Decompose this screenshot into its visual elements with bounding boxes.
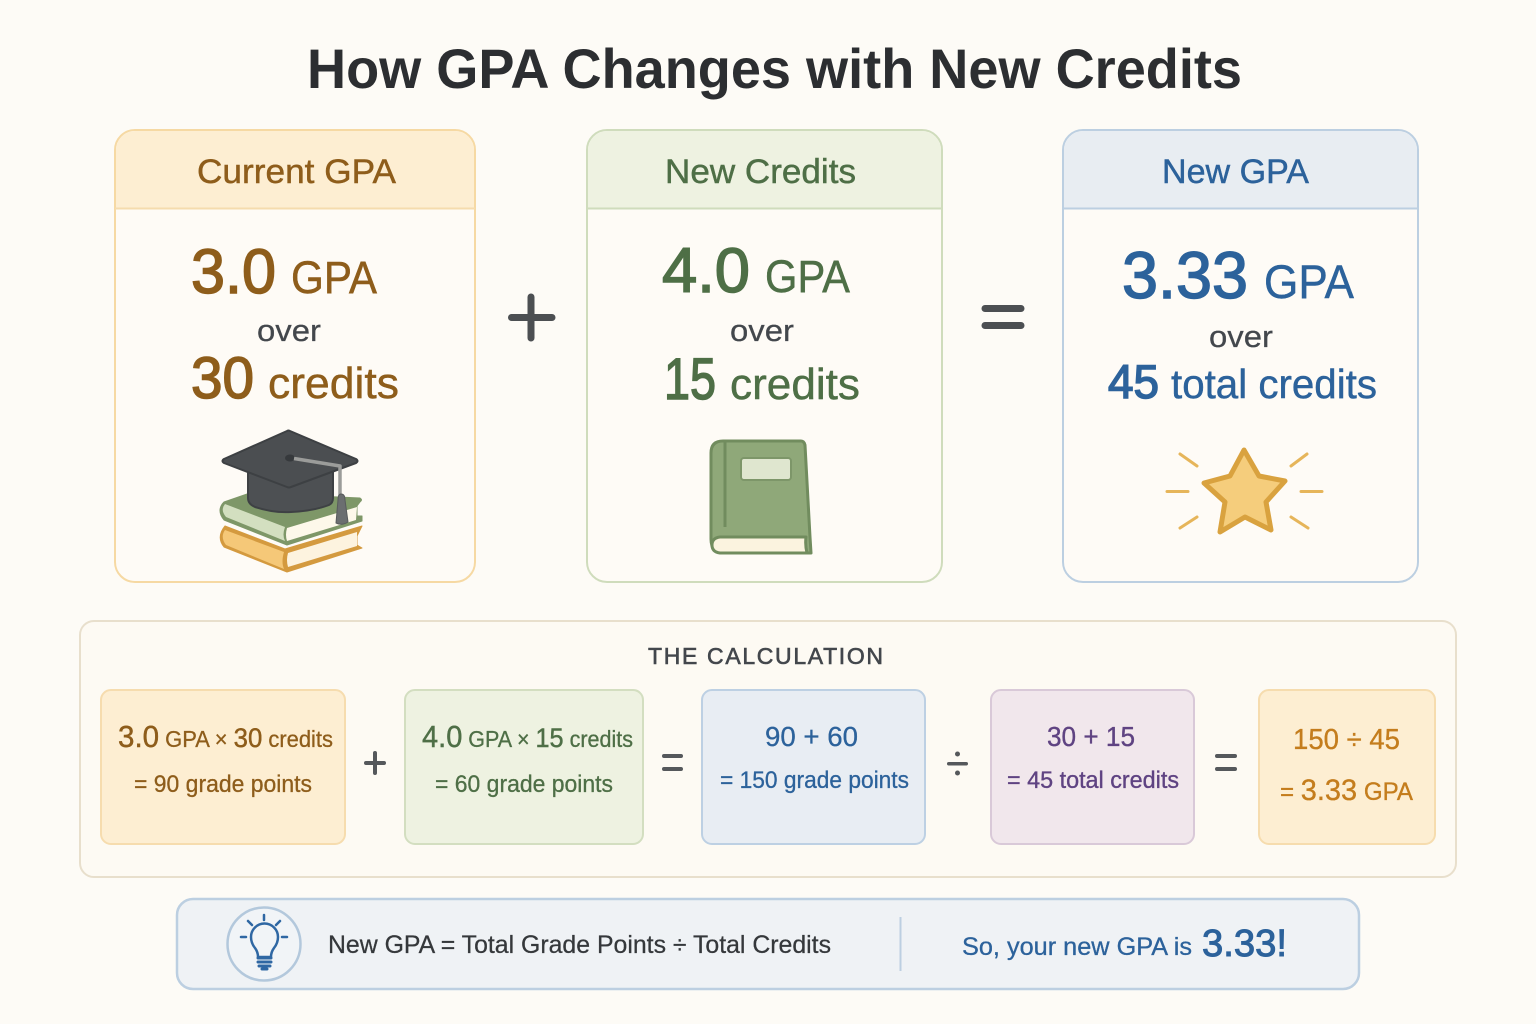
value: 15 credits: credits bbox=[730, 360, 860, 409]
value: 4.0 GPA bbox=[662, 236, 850, 306]
value: 15 credits: 15 bbox=[664, 347, 716, 412]
step: total grade points: = 150 grade points bbox=[720, 767, 909, 794]
operator: equals bbox=[664, 756, 681, 769]
value: 3.33 GPA: GPA bbox=[1264, 255, 1355, 308]
value: 45 total credits: 45 bbox=[1108, 355, 1159, 408]
step: result bbox=[1259, 690, 1435, 844]
result text: So, your new GPA is bbox=[962, 933, 1192, 961]
operator: plus bbox=[366, 753, 384, 773]
value: 3.0 GPA: 3.0 bbox=[191, 237, 276, 307]
value: 30 credits bbox=[191, 346, 399, 411]
result text: 3.33! bbox=[1202, 923, 1287, 965]
panel header: new GPA bbox=[1063, 131, 1418, 208]
operator: equals bbox=[1217, 756, 1235, 769]
panel: new credits bbox=[587, 130, 942, 582]
step: new grade points: = 60 grade points bbox=[435, 771, 613, 798]
operator: plus bbox=[512, 297, 552, 338]
step: current grade points bbox=[101, 690, 345, 844]
panel: new GPA bbox=[1063, 130, 1418, 582]
panel: the calculation bbox=[80, 621, 1456, 877]
step: total grade points: 90 + 60 bbox=[765, 721, 858, 752]
panel header: new GPA: New GPA bbox=[1162, 153, 1309, 191]
step: total credits: = 45 total credits bbox=[1007, 767, 1179, 794]
step: total credits bbox=[991, 690, 1194, 844]
operator: divide bbox=[947, 752, 968, 776]
value: 45 total credits bbox=[1108, 355, 1377, 408]
value: 3.33 GPA bbox=[1122, 238, 1355, 312]
step: result: = 3.33 GPA bbox=[1280, 774, 1413, 807]
value: 15 credits bbox=[664, 347, 860, 412]
step: current grade points: 3.0 GPA × 30 credits bbox=[118, 719, 333, 754]
value: 45 total credits: total credits bbox=[1171, 361, 1377, 407]
operator: equals bbox=[985, 308, 1021, 326]
step: total credits: 30 + 15 bbox=[1047, 721, 1135, 752]
icon: light bulb bbox=[228, 908, 300, 980]
heading: the calculation: THE CALCULATION bbox=[648, 643, 883, 669]
panel header: current GPA: Current GPA bbox=[197, 153, 396, 191]
icon: graduation cap on books bbox=[220, 430, 362, 572]
value: 3.0 GPA bbox=[191, 237, 377, 307]
panel: summary bar bbox=[177, 899, 1359, 989]
step: current grade points: = 90 grade points bbox=[134, 771, 312, 798]
icon: star with rays bbox=[1167, 450, 1322, 532]
result text bbox=[962, 923, 1287, 965]
value: 4.0 GPA: GPA bbox=[765, 251, 850, 302]
panel: current GPA bbox=[115, 130, 475, 582]
title: How GPA Changes with New Credits bbox=[307, 37, 1242, 100]
formula text: New GPA = Total Grade Points ÷ Total Credits bbox=[328, 931, 831, 959]
value: 30 credits: 30 bbox=[191, 346, 254, 411]
panel header: new credits: New Credits bbox=[665, 153, 856, 191]
value: 3.33 GPA: 3.33 bbox=[1122, 238, 1248, 312]
value: 30 credits: credits bbox=[268, 359, 399, 408]
icon: green book bbox=[711, 441, 811, 553]
step: total grade points bbox=[702, 690, 925, 844]
label: over: over bbox=[1209, 319, 1273, 354]
value: 4.0 GPA: 4.0 bbox=[662, 236, 750, 306]
step: new grade points bbox=[405, 690, 643, 844]
panel header: current GPA bbox=[115, 131, 475, 208]
value: 3.0 GPA: GPA bbox=[291, 252, 377, 303]
step: result: 150 ÷ 45 bbox=[1293, 724, 1400, 756]
label: over: over bbox=[257, 313, 321, 348]
label: over: over bbox=[730, 313, 794, 348]
step: new grade points: 4.0 GPA × 15 credits bbox=[422, 719, 633, 754]
panel header: new credits bbox=[587, 131, 942, 208]
